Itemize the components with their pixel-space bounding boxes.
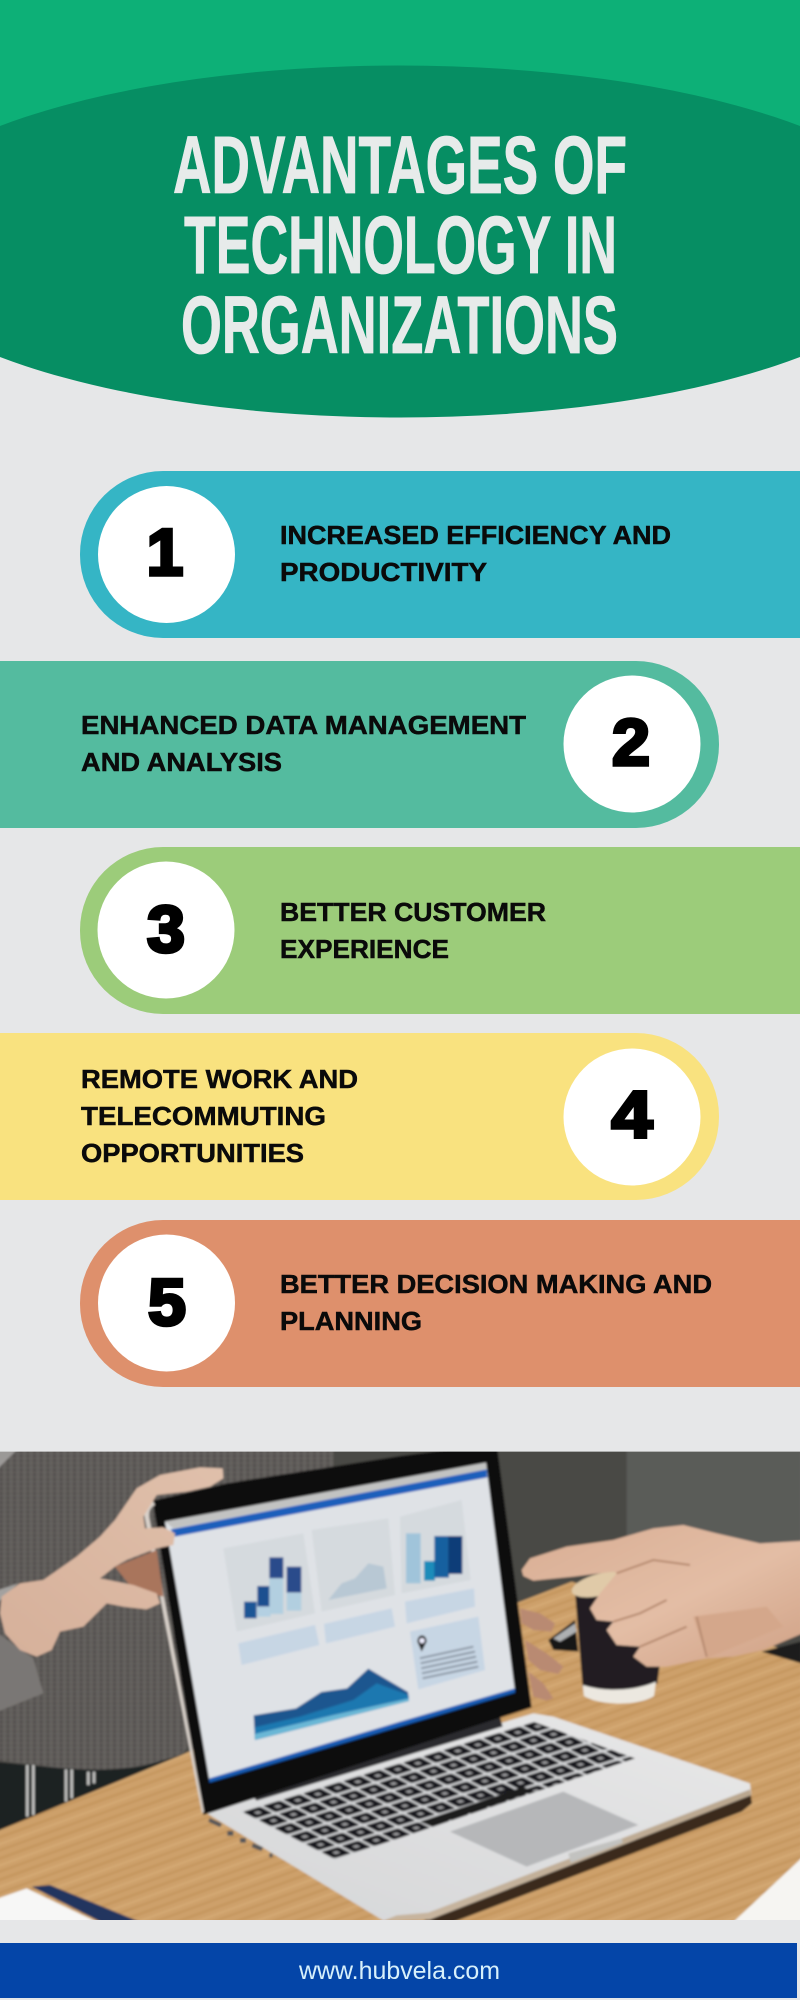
website url: www.hubvela.com bbox=[298, 1957, 500, 1985]
area chart middle bbox=[328, 1563, 387, 1600]
number badge 4 bbox=[564, 1048, 700, 1186]
fingers behind the screen bbox=[520, 1608, 563, 1701]
footer bar bbox=[0, 1943, 797, 1998]
right hand pointing bbox=[522, 1525, 800, 1667]
left hand bbox=[0, 1467, 223, 1657]
text: item 2 bbox=[81, 710, 526, 777]
number badge 1 bbox=[98, 486, 235, 623]
title bbox=[173, 120, 627, 371]
laptop screen bbox=[165, 1463, 515, 1783]
panel: item 2 bbox=[0, 661, 719, 828]
text: item 5: PLANNING bbox=[280, 1306, 422, 1336]
map pin bbox=[417, 1635, 427, 1652]
text: item 3: BETTER CUSTOMER bbox=[280, 897, 546, 927]
text: item 1: INCREASED EFFICIENCY AND bbox=[280, 520, 671, 550]
panel text lines bbox=[420, 1647, 478, 1678]
white surface bottom right bbox=[733, 1857, 800, 1920]
bar chart left bbox=[244, 1557, 301, 1618]
striped shirt bbox=[0, 1755, 182, 1833]
number badge 3 bbox=[98, 862, 234, 998]
panel: item 4 bbox=[0, 1033, 719, 1200]
text: item 3: EXPERIENCE bbox=[280, 934, 449, 964]
photo: laptop on desk with two people bbox=[0, 1443, 800, 1927]
large area chart bbox=[254, 1669, 409, 1740]
keyboard bbox=[240, 1722, 635, 1860]
number badge 4: 4 bbox=[612, 1077, 653, 1151]
number badge 2: 2 bbox=[612, 705, 650, 779]
bar chart right bbox=[406, 1533, 462, 1583]
number badge 1: 1 bbox=[147, 515, 183, 589]
number badge 2 bbox=[564, 676, 700, 812]
panel: item 3 bbox=[80, 847, 800, 1014]
front notch bbox=[568, 1838, 623, 1863]
text: item 4: OPPORTUNITIES bbox=[81, 1138, 304, 1168]
number badge 5 bbox=[98, 1234, 235, 1372]
text: item 4 bbox=[81, 1064, 358, 1168]
text: item 2: ENHANCED DATA MANAGEMENT bbox=[81, 710, 526, 740]
phone bbox=[548, 1620, 578, 1652]
number badge 3: 3 bbox=[147, 892, 185, 966]
paper and pen bbox=[0, 1884, 138, 1920]
dashboard panels bbox=[223, 1500, 471, 1632]
header band bbox=[0, 0, 800, 418]
text: item 4: REMOTE WORK AND bbox=[81, 1064, 358, 1094]
panel: item 1 bbox=[80, 471, 800, 638]
dark object by right hand bbox=[762, 1640, 800, 1665]
text: item 5: BETTER DECISION MAKING AND bbox=[280, 1269, 712, 1299]
trackpad bbox=[450, 1792, 638, 1867]
sweater bbox=[0, 1443, 333, 1770]
hinge bbox=[247, 1717, 503, 1801]
text: item 4: TELECOMMUTING bbox=[81, 1101, 326, 1131]
coffee cup bbox=[569, 1566, 660, 1703]
number badge 5: 5 bbox=[148, 1265, 186, 1339]
text: item 3 bbox=[280, 897, 546, 964]
wooden table bbox=[0, 1582, 800, 1927]
text: item 2: AND ANALYSIS bbox=[81, 747, 282, 777]
spacebar bbox=[420, 1787, 533, 1827]
text: item 1: PRODUCTIVITY bbox=[280, 557, 487, 587]
text: item 5 bbox=[280, 1269, 712, 1336]
laptop lid bbox=[153, 1443, 532, 1815]
laptop base bbox=[204, 1713, 752, 1923]
panel: item 5 bbox=[80, 1220, 800, 1387]
text: item 1 bbox=[280, 520, 671, 587]
ports bbox=[208, 1818, 273, 1857]
